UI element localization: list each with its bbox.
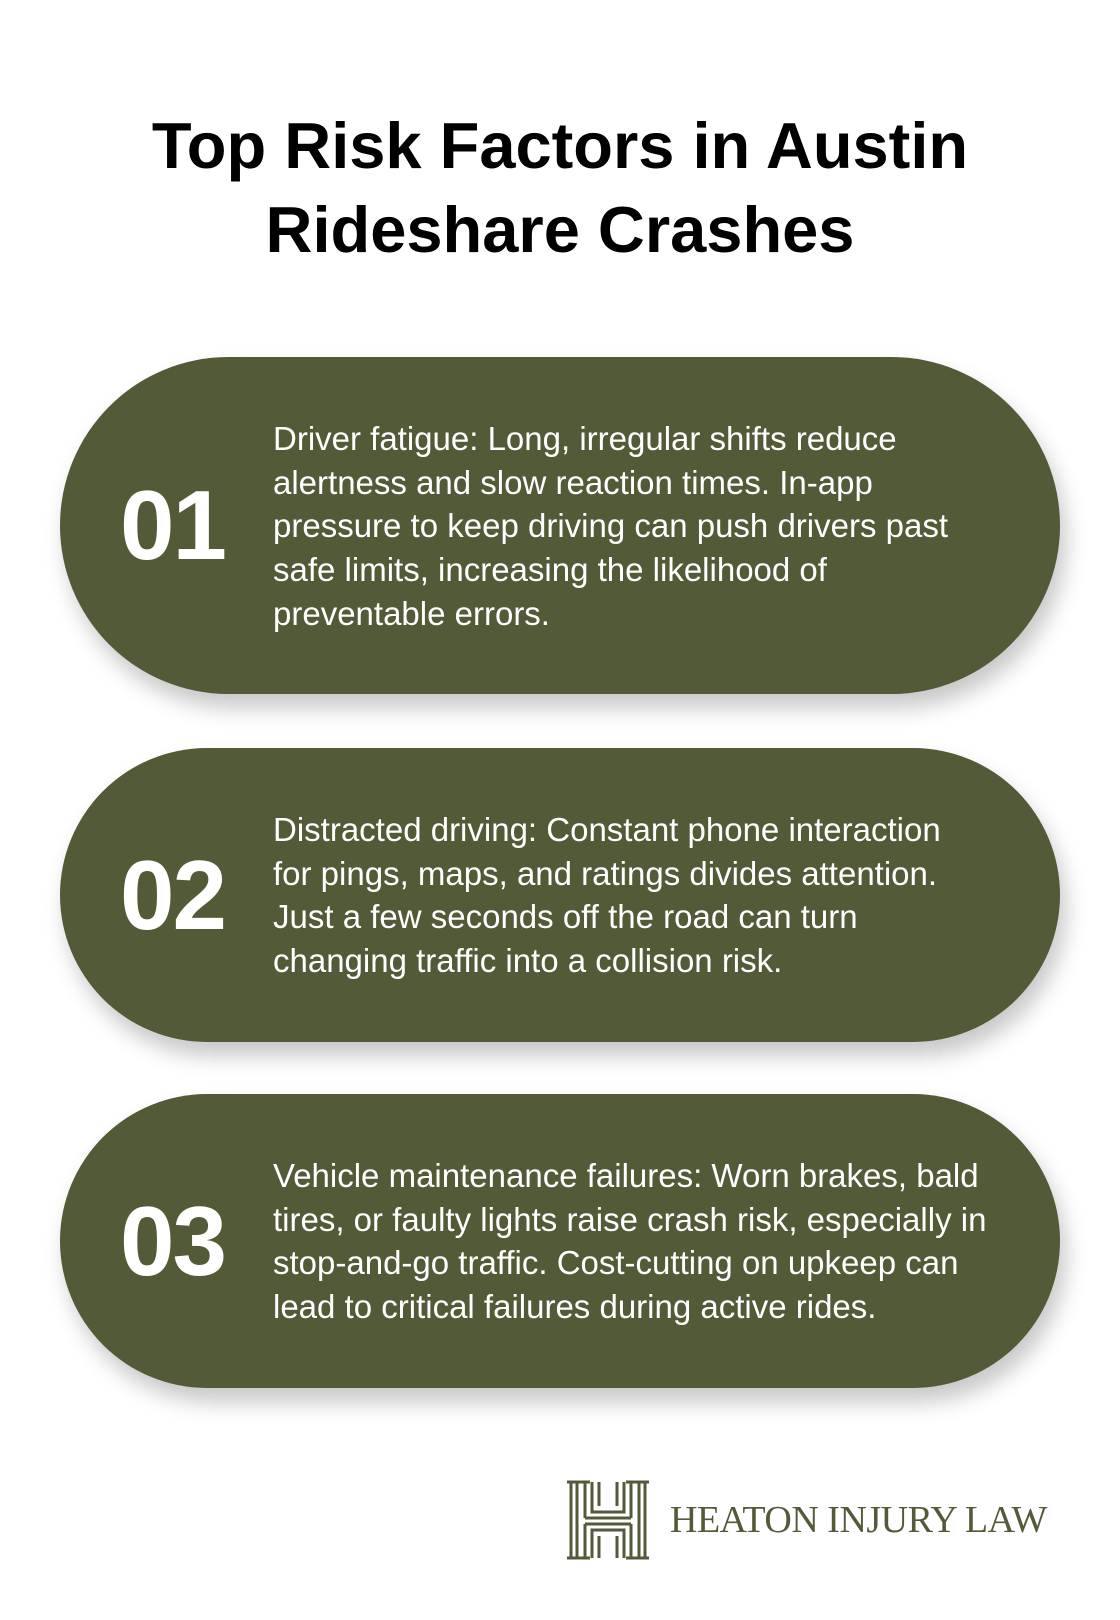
logo	[567, 1480, 1048, 1560]
text block 03	[273, 1157, 986, 1325]
title	[152, 109, 968, 266]
text block 01: Driver fatigue: Long, irregular shifts reduce	[273, 420, 897, 457]
logo text: HEATON INJURY LAW	[670, 1499, 1047, 1541]
panel: 01 driver fatigue	[60, 357, 1060, 694]
text block 03: Vehicle maintenance failures: Worn brakes, bald	[273, 1157, 979, 1194]
text block 03: stop-and-go traffic. Cost-cutting on upkeep can	[273, 1244, 958, 1281]
text block 02: Just a few seconds off the road can turn	[273, 898, 858, 935]
text block 03: tires, or faulty lights raise crash risk, especially in	[273, 1201, 986, 1238]
text block 01: preventable errors.	[273, 595, 550, 632]
title: Top Risk Factors in Austin	[152, 109, 968, 182]
text block 01: alertness and slow reaction times. In-app	[273, 464, 873, 501]
number 02: 02	[120, 840, 225, 950]
title: Rideshare Crashes	[266, 193, 854, 266]
panel: 03 vehicle maintenance	[60, 1094, 1060, 1388]
text block 02: Distracted driving: Constant phone interaction	[273, 811, 941, 848]
number 03: 03	[120, 1186, 225, 1296]
text block 03: lead to critical failures during active rides.	[273, 1288, 876, 1325]
number 01: 01	[120, 470, 225, 580]
icon: H monogram	[567, 1480, 649, 1560]
text block 01: safe limits, increasing the likelihood of	[273, 551, 827, 588]
text block 02: changing traffic into a collision risk.	[273, 942, 782, 979]
text block 01: pressure to keep driving can push drivers past	[273, 507, 948, 544]
text block 01	[273, 420, 948, 632]
text block 02: for pings, maps, and ratings divides attention.	[273, 855, 937, 892]
text block 02	[273, 811, 941, 979]
panel: 02 distracted driving	[60, 748, 1060, 1042]
